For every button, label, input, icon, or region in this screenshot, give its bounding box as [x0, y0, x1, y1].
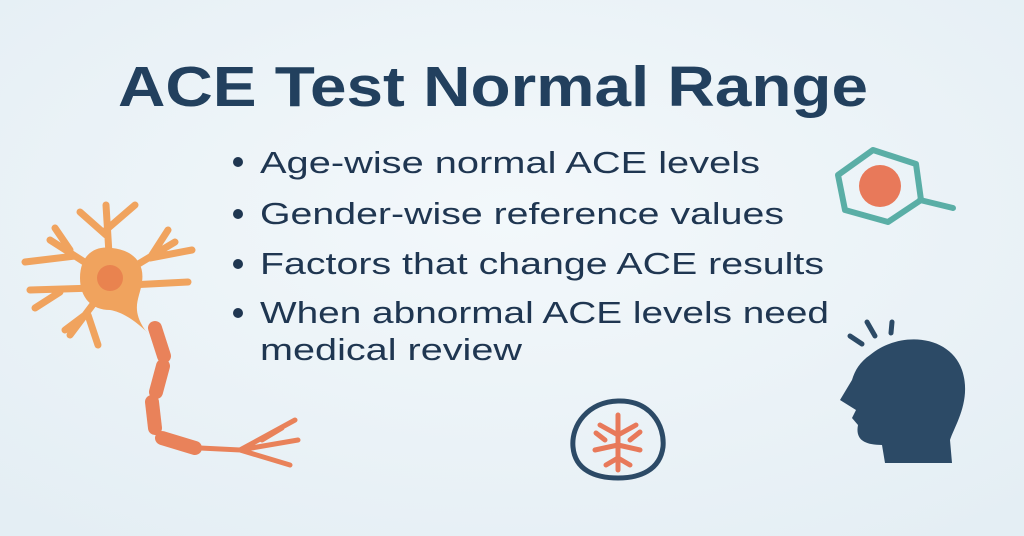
- bullet 4: [233, 295, 829, 367]
- icon: lungs circle: [573, 401, 663, 478]
- icon: head: [840, 322, 965, 463]
- bullet 1: Age-wise normal ACE levels: [260, 145, 760, 180]
- title: ACE Test Normal Range: [118, 55, 868, 119]
- bullet 2: Gender-wise reference values: [260, 196, 784, 231]
- bullet 4: When abnormal ACE levels need: [260, 295, 829, 330]
- icon: magnifier hexagon: [838, 150, 953, 222]
- icon: neuron: [25, 205, 298, 465]
- bullet 4: medical review: [260, 332, 523, 367]
- bullet list: [233, 145, 829, 367]
- bullet 3: Factors that change ACE results: [260, 246, 824, 281]
